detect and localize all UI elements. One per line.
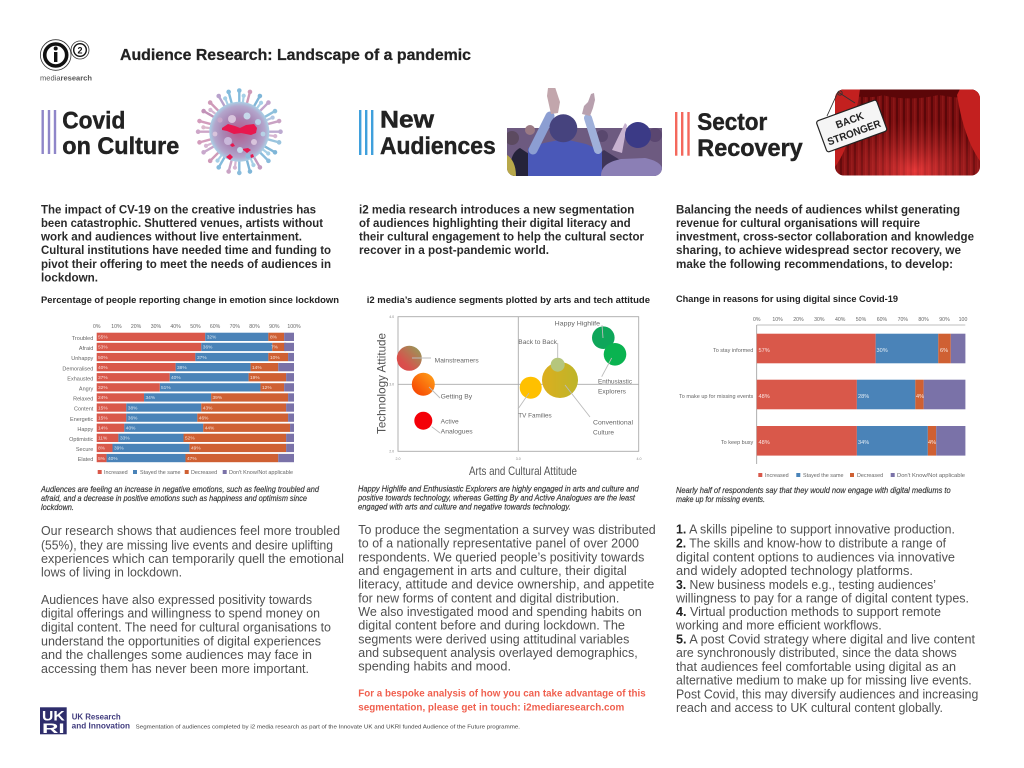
- value labels: 14%: [98, 426, 108, 432]
- chart caption: Happy Highlife and Enthusiastic Explorers are highly engaged in arts and culture and: [358, 484, 639, 494]
- body text: literacy, attitude and device ownership, and appetite: [358, 578, 654, 592]
- axis labels: 0%: [93, 324, 101, 330]
- legend: Increased: [104, 470, 128, 476]
- chart caption: positive towards technology, whereas Getting By and Active Analogues are the least: [357, 494, 636, 502]
- axis: 50%: [856, 317, 867, 323]
- logo: UKRI: and Innovation: [72, 721, 130, 730]
- value labels: 49%: [191, 446, 201, 452]
- value labels: 33%: [120, 436, 130, 442]
- chart caption: engaged with arts and culture and negative towards technology.: [358, 502, 571, 512]
- value labels: 4%: [928, 440, 936, 446]
- chart caption: [676, 486, 951, 504]
- bars: [97, 333, 294, 462]
- axis labels: 10%: [111, 324, 122, 330]
- call to action: For a bespoke analysis of how you can take advantage of this: [358, 688, 646, 700]
- row labels: Afraid: [79, 346, 93, 352]
- body text: accessing them has never been more important.: [41, 662, 309, 676]
- value labels: 43%: [203, 405, 213, 411]
- intro text: [359, 202, 644, 257]
- intro text: Cultural institutions have needed time and funding to: [41, 243, 331, 257]
- call to action: segmentation, please get in touch: i2mediaresearch.com: [358, 702, 624, 714]
- value labels: 46%: [199, 415, 209, 421]
- intro text: [676, 202, 974, 271]
- body text: segments were derived using attitudinal variables: [358, 632, 629, 646]
- value labels: 7%: [271, 345, 279, 351]
- recommendations list: 4. Virtual production methods to support remote: [676, 605, 941, 619]
- recommendations list: Post Covid, this may diversify audiences and increasing: [676, 687, 978, 701]
- value labels: 52%: [185, 436, 195, 442]
- ticks: 2.0: [389, 450, 394, 454]
- image: theatre curtain with sign: BACK: [834, 110, 866, 131]
- segment labels: Explorers: [598, 388, 627, 395]
- section heading: Covid on Culture: Covid: [62, 107, 125, 134]
- axis: 10%: [772, 317, 783, 323]
- recommendations list: 5. A post Covid strategy where digital and live content: [676, 632, 975, 646]
- value labels: 28%: [858, 394, 869, 400]
- body text: and engagement in arts and culture, their digital: [358, 564, 627, 578]
- legend: Stayed the same: [140, 470, 180, 476]
- legend: Decreased: [857, 473, 883, 479]
- value labels: 55%: [98, 335, 108, 341]
- body text: [358, 523, 656, 674]
- section heading: Covid on Culture: [42, 107, 179, 160]
- value labels: 50%: [98, 355, 108, 361]
- value labels: 10%: [270, 355, 280, 361]
- bar chart: reasons for using digital: [679, 317, 967, 479]
- axis labels: 80%: [249, 324, 260, 330]
- section heading: New Audiences: Audiences: [380, 133, 496, 160]
- body text: digital content. The need for cultural organisations to: [41, 621, 331, 635]
- intro text: recover in a post-pandemic world.: [359, 243, 549, 257]
- segment labels: Getting By: [441, 394, 473, 401]
- row labels: Relaxed: [73, 397, 93, 403]
- chart caption: Audiences are feeling an increase in negative emotions, such as feeling troubled and: [40, 485, 319, 494]
- segment labels: TV Families: [518, 412, 552, 419]
- bubble chart: audience segments: [374, 315, 642, 478]
- value labels: 34%: [858, 440, 869, 446]
- image: applauding crowd: [505, 87, 662, 176]
- recommendations list: and widely adopted technology platforms.: [676, 564, 913, 578]
- recommendations list: alternative medium to make up for missing live events.: [676, 674, 972, 688]
- axis: 70%: [898, 317, 908, 323]
- intro text: been catastrophic. Shuttered venues, artists without: [41, 216, 323, 230]
- body text: to of a nationally representative panel of over 2000: [358, 537, 639, 551]
- call to action: [358, 688, 646, 714]
- body text: We also investigated mood and spending habits on: [358, 605, 642, 619]
- row labels: Elated: [78, 457, 93, 463]
- row labels: To keep busy: [721, 440, 754, 446]
- plot frame and axes: [398, 317, 639, 451]
- value labels: 14%: [252, 365, 262, 371]
- value labels: 8%: [270, 335, 278, 341]
- legend: [98, 470, 293, 476]
- axis labels: 20%: [131, 324, 142, 330]
- chart caption: afraid, and a decrease in positive emotions such as happiness and optimism since: [41, 494, 307, 503]
- intro text: of audiences highlighting their digital literacy and: [359, 216, 631, 230]
- ticks: 3.0: [389, 383, 394, 387]
- value labels: 47%: [187, 456, 197, 462]
- recommendations list: [675, 523, 978, 715]
- row labels: Angry: [79, 386, 94, 392]
- body text: and the challenges some audiences may face in: [41, 648, 312, 662]
- title: Audience Research: Landscape of a pandemic: [120, 47, 471, 64]
- bars: [757, 334, 965, 456]
- row labels: Secure: [76, 447, 93, 453]
- axis: 90%: [939, 317, 950, 323]
- logo: UKRI: UK: [42, 707, 65, 723]
- image: theatre curtain with sign: [816, 89, 980, 176]
- intro text: their cultural engagement to help the cultural sector: [359, 230, 644, 244]
- row labels: To make up for missing events: [679, 394, 754, 400]
- value labels: 48%: [758, 394, 770, 400]
- axis labels: 30%: [151, 324, 161, 330]
- intro text: [40, 202, 331, 284]
- body text: respondents. We queried people’s positivity towards: [358, 550, 644, 564]
- axis title: technology attitude: Technology Attitude: [374, 333, 388, 434]
- value labels: 38%: [177, 365, 187, 371]
- ticks: [389, 315, 642, 461]
- row labels: Exhausted: [67, 376, 93, 382]
- value labels: 12%: [262, 385, 272, 391]
- segment labels: Active: [441, 418, 459, 425]
- chart heading: segments: i2 media’s audience segments plotted by arts and tech attitude: [367, 295, 650, 306]
- value labels: 11%: [98, 436, 108, 442]
- axis labels: 40%: [170, 324, 181, 330]
- axis labels: 70%: [230, 324, 240, 330]
- image: theatre curtain with sign: STRONGER: [826, 118, 883, 148]
- value labels: 24%: [98, 395, 108, 401]
- axis labels: [93, 324, 301, 330]
- segment labels: Mainstreamers: [435, 358, 479, 365]
- value labels: 32%: [207, 335, 217, 341]
- intro text: lockdown.: [41, 270, 98, 284]
- row labels: [679, 348, 754, 446]
- chart heading: digital reasons: Change in reasons for using digital since Covid-19: [676, 294, 898, 305]
- body text: digital content before and during lockdown. The: [358, 619, 625, 633]
- value labels: 38%: [128, 405, 138, 411]
- value labels: 8%: [98, 446, 106, 452]
- axis: 80%: [918, 317, 929, 323]
- intro text: i2 media research introduces a new segmentation: [359, 202, 634, 216]
- legend: Decreased: [191, 470, 217, 476]
- logo: UKRI: RI: [42, 720, 65, 736]
- panel: sector recovery: [675, 89, 980, 715]
- chart caption: [40, 485, 319, 512]
- value labels: 19%: [250, 375, 260, 381]
- axis: [753, 317, 967, 464]
- intro text: Balancing the needs of audiences whilst generating: [676, 202, 960, 216]
- body text: experiences which can temporarily quell the emotional: [41, 552, 344, 566]
- ticks: 4.0: [636, 457, 642, 461]
- row labels: Content: [74, 407, 94, 413]
- logo: UKRI: UK Research: [72, 712, 121, 721]
- recommendations list: reach and access to UK cultural content globally.: [676, 701, 943, 715]
- value labels: [98, 335, 280, 462]
- section heading: Sector Recovery: Sector: [697, 109, 767, 136]
- value labels: 40%: [108, 456, 118, 462]
- chart caption: [357, 484, 639, 512]
- legend: Stayed the same: [803, 473, 843, 479]
- axis labels: 90%: [269, 324, 280, 330]
- axis: 100: [959, 317, 967, 323]
- value labels: 30%: [876, 348, 888, 354]
- logo: i2 media research: [40, 40, 92, 82]
- intro text: The impact of CV-19 on the creative industries has: [41, 202, 316, 216]
- body text: (55%), they are missing live events and desire uplifting: [41, 538, 333, 552]
- body text: and subsequent analysis overlayed demographics,: [358, 646, 638, 660]
- row labels: Happy: [77, 427, 94, 433]
- axis labels: 50%: [190, 324, 201, 330]
- value labels: 39%: [114, 446, 124, 452]
- intro text: pivot their offering to meet the needs of audiences in: [41, 257, 331, 271]
- value labels: 37%: [98, 375, 108, 381]
- recommendations list: working and more efficient workflows.: [675, 619, 882, 633]
- recommendations list: willingness to pay for a range of digital content types.: [675, 591, 969, 605]
- row labels: To stay informed: [713, 348, 753, 354]
- body text: digital offerings and willingness to spend money on: [41, 607, 320, 621]
- value labels: 40%: [98, 365, 108, 371]
- value labels: 6%: [940, 348, 948, 354]
- body text: spending habits and mood.: [358, 660, 511, 674]
- axis: 30%: [814, 317, 825, 323]
- logo: UKRI: [40, 707, 130, 736]
- value labels: 40%: [171, 375, 181, 381]
- row labels: [62, 336, 94, 463]
- section heading: Sector Recovery: [675, 109, 803, 162]
- axis title: arts and cultural attitude: Arts and Cultural Attitude: [469, 464, 577, 478]
- segment labels: Back to Back: [518, 339, 558, 346]
- legend: Increased: [765, 473, 789, 479]
- section heading: New Audiences: [359, 107, 496, 160]
- segment labels: Culture: [593, 429, 614, 436]
- bubbles: [397, 326, 626, 430]
- value labels: [758, 348, 948, 446]
- axis: 0%: [753, 317, 761, 323]
- segment labels: Analogues: [441, 428, 473, 435]
- icon: coronavirus: [196, 88, 283, 175]
- intro text: investment, cross-sector collaboration and knowledge: [676, 230, 974, 244]
- chart heading: emotion: Percentage of people reporting change in emotion since lockdown: [41, 295, 339, 306]
- legend: Don't Know/Not applicable: [897, 473, 965, 479]
- value labels: 5%: [98, 456, 106, 462]
- body text: for new forms of content and digital distribution.: [358, 591, 619, 605]
- value labels: 39%: [212, 395, 223, 401]
- intro text: make the following recommendations, to develop:: [676, 257, 953, 271]
- panel: covid on culture: [40, 88, 344, 676]
- section heading: Covid on Culture: on Culture: [62, 133, 179, 160]
- value labels: 36%: [128, 415, 138, 421]
- intro text: work and audiences without live entertainment.: [40, 230, 302, 244]
- segment labels: Enthusiastic: [598, 378, 633, 385]
- recommendations list: digital content options to audiences via innovative: [676, 550, 955, 564]
- intro text: sharing, to achieve widespread sector recovery, we: [676, 243, 961, 257]
- row labels: Optimistic: [69, 437, 94, 443]
- segment labels: [435, 320, 634, 436]
- body text: understand the opportunities of digital experiences: [41, 634, 321, 648]
- row labels: Unhappy: [71, 356, 94, 362]
- row labels: Energetic: [70, 417, 94, 423]
- axis: 20%: [793, 317, 804, 323]
- recommendations list: that audiences feel comfortable using digital as an: [676, 660, 956, 674]
- row labels: Demoralised: [62, 366, 93, 372]
- ticks: 4.0: [389, 315, 394, 319]
- value labels: 15%: [98, 405, 108, 411]
- panel: new audiences: [357, 87, 662, 714]
- value labels: 36%: [203, 345, 213, 351]
- value labels: 4%: [916, 394, 924, 400]
- body text: [41, 524, 344, 676]
- recommendations list: 3. New business models e.g., testing audiences’: [676, 578, 936, 592]
- body text: lows of living in lockdown.: [41, 566, 182, 580]
- recommendations list: 2. The skills and know-how to distribute a range of: [676, 536, 946, 550]
- recommendations list: 1. A skills pipeline to support innovative production.: [676, 523, 955, 537]
- logo: i2 media research: 2: [77, 46, 83, 56]
- chart caption: Nearly half of respondents say that they would now engage with digital mediums to: [676, 486, 951, 495]
- value labels: 57%: [758, 348, 770, 354]
- chart caption: make up for missing events.: [676, 495, 765, 504]
- ticks: 2.0: [396, 457, 400, 461]
- value labels: 40%: [126, 426, 136, 432]
- value labels: 34%: [146, 395, 156, 401]
- value labels: 53%: [98, 345, 108, 351]
- value labels: 44%: [205, 426, 215, 432]
- section heading: Sector Recovery: Recovery: [697, 135, 803, 162]
- axis: 40%: [835, 317, 846, 323]
- ticks: 3.0: [516, 457, 521, 461]
- value labels: 51%: [161, 385, 171, 391]
- axis: 60%: [877, 317, 887, 323]
- body text: Audiences have also expressed positivity towards: [41, 593, 312, 607]
- row labels: Troubled: [72, 336, 93, 342]
- chart caption: lockdown.: [41, 503, 74, 512]
- axis labels: 100%: [287, 324, 301, 330]
- body text: Our research shows that audiences feel more troubled: [41, 524, 340, 538]
- footnote: Segmentation of audiences completed by i2 media research as part of the Innovate UK and UKRI funded Audience of the Future programme.: [136, 724, 520, 730]
- value labels: 48%: [758, 440, 770, 446]
- leader lines: [412, 325, 612, 433]
- legend: [758, 473, 965, 479]
- value labels: 32%: [98, 385, 108, 391]
- logo: i2 media research: mediaresearch: [40, 74, 92, 82]
- segment labels: Happy Highlife: [555, 320, 600, 327]
- value labels: 15%: [98, 415, 108, 421]
- intro text: revenue for cultural organisations will require: [676, 216, 920, 230]
- segment labels: Conventional: [593, 419, 634, 426]
- value labels: 37%: [197, 355, 207, 361]
- section heading: New Audiences: New: [380, 107, 434, 134]
- axis labels: 60%: [210, 324, 221, 330]
- body text: To produce the segmentation a survey was distributed: [358, 523, 656, 537]
- legend: Don't Know/Not applicable: [229, 470, 293, 476]
- recommendations list: are synchronously distributed, since the data shows: [676, 646, 957, 660]
- bar chart: change in emotion: [62, 324, 301, 476]
